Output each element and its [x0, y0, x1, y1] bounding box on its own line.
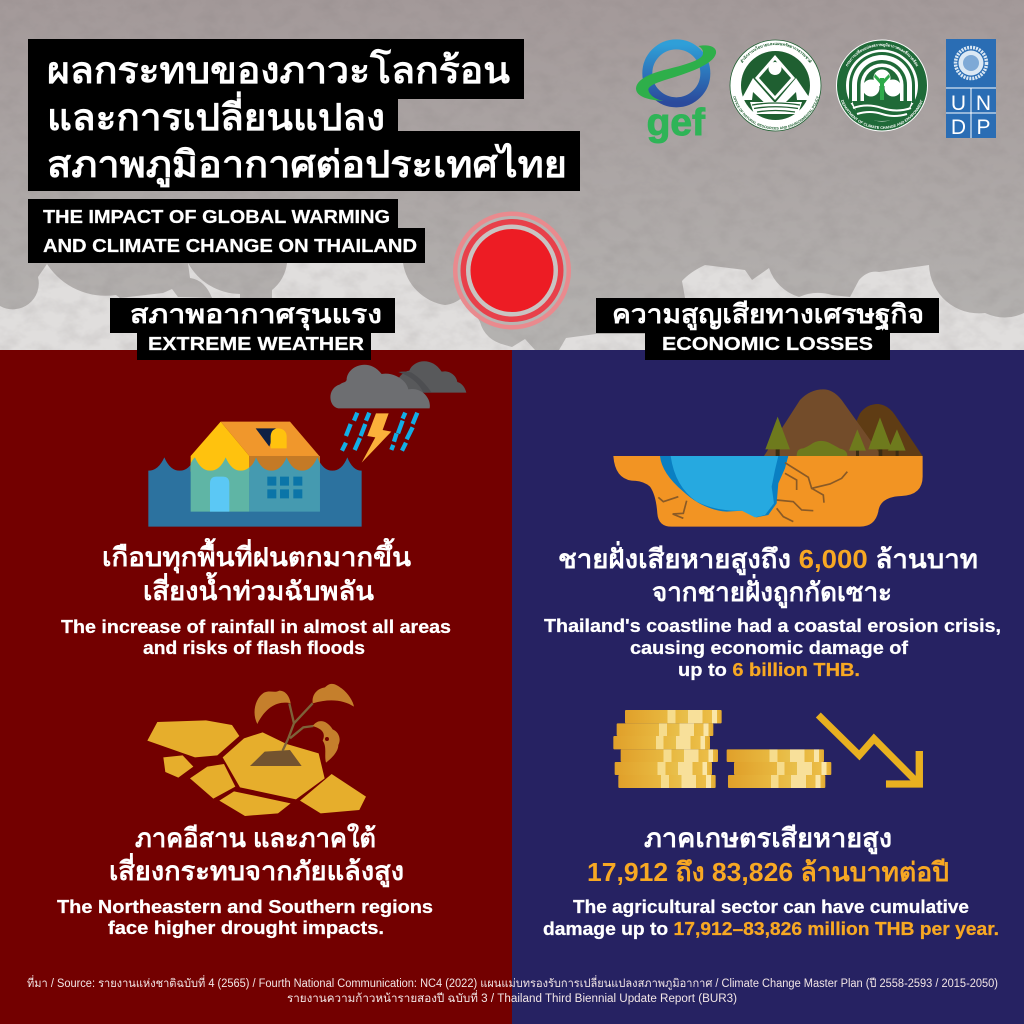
text block: rainfall: เสี่ยงน้ำท่วมฉับพลัน	[143, 571, 374, 606]
heading: economic losses: ECONOMIC LOSSES	[662, 333, 873, 354]
logos	[636, 39, 996, 144]
heading: economic losses	[596, 298, 939, 360]
logo: climate change department seal	[836, 40, 928, 132]
logo: UNDP: D	[951, 116, 966, 139]
text block: rainfall	[61, 537, 451, 658]
panel: extreme weather background	[0, 350, 512, 1024]
logo: climate change department seal: DEPARTMENT OF CLIMATE CHANGE AND ENVIRONMENT	[841, 100, 923, 129]
logo: UNDP: N	[976, 92, 991, 115]
icon: trees and bush	[765, 417, 906, 457]
arrow: falling trend	[818, 715, 919, 784]
text block: drought: face higher drought impacts.	[108, 917, 384, 938]
icon: storm clouds	[330, 361, 466, 408]
logo: GEF: gef	[647, 101, 705, 144]
text block: drought	[57, 823, 433, 938]
logo: UNDP: P	[976, 116, 991, 139]
icon: water	[660, 456, 788, 517]
text block: coastline: Thailand's coastline had a coastal erosion crisis,	[544, 615, 1001, 636]
text block: drought: ภาคอีสาน และภาคใต้	[135, 823, 376, 853]
text block: coastline	[544, 540, 1001, 680]
icon: plant stem	[283, 703, 313, 751]
icon: wilted leaves	[255, 684, 354, 763]
subtitle: English heading	[28, 199, 425, 263]
text block: agriculture: damage up to 17,912–83,826 million THB per year.	[543, 918, 999, 939]
icon: red warming sun	[453, 212, 571, 330]
text block: rainfall: and risks of flash floods	[143, 637, 365, 658]
icon: eroded coastline	[613, 389, 923, 527]
icon: flooded house with storm	[148, 361, 466, 527]
text block: coastline: up to 6 billion THB.	[678, 659, 860, 680]
text block: rainfall: เกือบทุกพื้นที่ฝนตกมากขึ้น	[102, 537, 411, 574]
text block: drought: เสี่ยงกระทบจากภัยแล้งสูง	[109, 852, 404, 888]
icon: coin stacks	[613, 710, 831, 788]
title: Thai heading: สภาพภูมิอากาศต่อประเทศไทย	[47, 142, 567, 188]
icon: house	[191, 422, 320, 512]
icon: cracked ground plates	[147, 720, 366, 816]
text block: coastline: causing economic damage of	[630, 637, 909, 658]
logo: GEF	[636, 44, 716, 144]
logo: UNDP: U	[951, 92, 966, 115]
light cloud band	[0, 263, 1024, 350]
logo: natural resources office seal: OFFICE OF NATURAL RESOURCES AND ENVIRONMENTAL POLICY	[733, 96, 819, 130]
source note	[27, 975, 998, 1005]
heading: extreme weather	[110, 298, 395, 360]
text block: agriculture	[543, 823, 999, 939]
icon: orange land	[613, 456, 923, 527]
heading: economic losses: ความสูญเสียทางเศรษฐกิจ	[612, 299, 924, 332]
icon: cracked earth with wilted plant	[147, 684, 366, 816]
logo: UNDP	[946, 39, 996, 139]
textured grey background	[0, 0, 1024, 350]
subtitle: English heading: THE IMPACT OF GLOBAL WARMING	[43, 206, 390, 227]
icon: lightning bolt	[362, 413, 391, 463]
text block: agriculture: ภาคเกษตรเสียหายสูง	[644, 823, 892, 855]
title: Thai heading	[28, 39, 580, 191]
logo: climate change department seal: กรมการเปลี่ยนแปลงสภาพภูมิอากาศและสิ่งแวดล้อม	[846, 43, 918, 66]
source note: รายงานความก้าวหน้ารายสองปี ฉบับที่ 3 / Thailand Third Biennial Update Report (BUR3)	[287, 990, 737, 1005]
heading: extreme weather: EXTREME WEATHER	[148, 333, 364, 354]
heading: extreme weather: สภาพอากาศรุนแรง	[130, 299, 382, 331]
text block: coastline: จากชายฝั่งถูกกัดเซาะ	[652, 573, 892, 609]
text block: coastline: ชายฝั่งเสียหายสูงถึง 6,000 ล้านบาท	[558, 540, 978, 576]
logo: natural resources office seal: สำนักงานนโยบายและแผนทรัพยากรธรรมชาติ	[740, 42, 812, 64]
icon: soil mound	[250, 750, 302, 766]
subtitle: English heading: AND CLIMATE CHANGE ON THAILAND	[43, 235, 417, 256]
title: Thai heading: ผลกระทบของภาวะโลกร้อน	[47, 48, 510, 91]
text block: drought: The Northeastern and Southern regions	[57, 896, 433, 917]
text block: rainfall: The increase of rainfall in almost all areas	[61, 616, 451, 637]
panel: economic losses background	[512, 350, 1024, 1024]
text block: agriculture: The agricultural sector can have cumulative	[573, 896, 969, 917]
logo: natural resources office seal	[730, 40, 822, 132]
icon: rain streaks	[342, 413, 417, 451]
title: Thai heading: และการเปลี่ยนแปลง	[47, 91, 385, 138]
icon: flood water	[148, 457, 362, 527]
icon: mountains	[764, 389, 923, 456]
text block: agriculture: 17,912 ถึง 83,826 ล้านบาทต่อปี	[587, 857, 949, 887]
source note: ที่มา / Source: รายงานแห่งชาติฉบับที่ 4 (2565) / Fourth National Communication: NC4 (2022) แผนแม่บทรองรับการเปลี่ยนแปลงสภาพภูมิอากาศ / Climate Change Master Plan (ปี 2558-2593 / 2015-2050)	[27, 975, 998, 990]
icon: ground cracks	[658, 463, 847, 522]
